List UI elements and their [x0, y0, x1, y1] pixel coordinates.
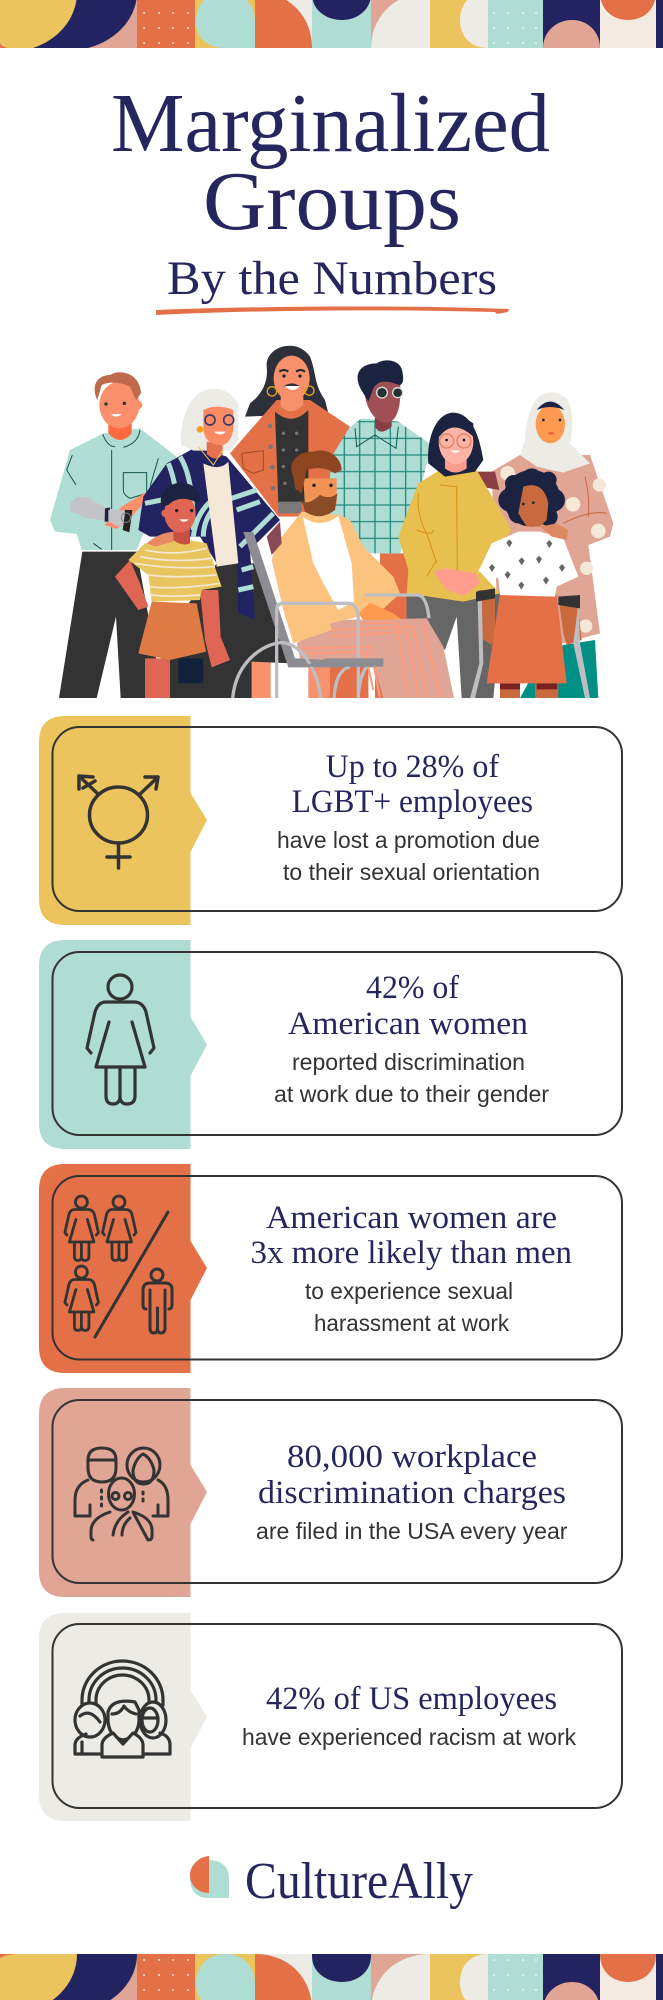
icon: three people under rainbow — [75, 1661, 170, 1757]
title — [111, 77, 550, 248]
title: Groups — [203, 155, 461, 248]
card 1: LGBT+ promotion — [39, 716, 622, 925]
card 1 colour tab — [39, 716, 207, 925]
top geometric banner — [0, 0, 663, 48]
card 3 outline — [52, 1176, 622, 1360]
orange underline stroke — [156, 306, 509, 315]
icon: woman — [87, 975, 154, 1104]
card 3 colour tab — [39, 1164, 207, 1373]
icon: three women to one man — [65, 1196, 172, 1337]
card 4 heading — [258, 1439, 566, 1511]
card 5 heading: 42% of US employees — [266, 1681, 557, 1717]
card 4 body: are filed in the USA every year — [256, 1518, 568, 1544]
card 1 heading — [292, 749, 533, 820]
card 2: American women discrimination — [39, 940, 622, 1149]
card 2 body — [274, 1049, 549, 1107]
icon: transgender symbol — [79, 776, 158, 868]
card 2 body: at work due to their gender — [274, 1081, 549, 1107]
card 4 colour tab — [39, 1388, 207, 1597]
card 5: racism at work — [39, 1613, 622, 1821]
card 5 outline — [52, 1624, 622, 1808]
person: man in wheelchair — [233, 450, 454, 698]
card 4 outline — [52, 1400, 622, 1583]
card 3 heading: 3x more likely than men — [250, 1235, 572, 1271]
person: man with prosthetic arm in mint shirt — [50, 372, 177, 698]
person: boy in yellow striped shirt — [115, 483, 230, 698]
card 4 heading: 80,000 workplace — [287, 1439, 537, 1475]
card 2 colour tab — [39, 940, 207, 1149]
logo wordmark: CultureAlly — [245, 1853, 473, 1910]
card 4 heading: discrimination charges — [258, 1475, 566, 1511]
bottom geometric banner — [0, 1954, 663, 2000]
card 2 heading: 42% of — [366, 970, 459, 1006]
icon: three people — [75, 1448, 168, 1540]
person: woman in hijab — [492, 392, 613, 698]
card 2 heading — [288, 970, 528, 1042]
card 5 colour tab — [39, 1613, 207, 1821]
card 2 outline — [52, 952, 622, 1135]
person: man with dark glasses in plaid shirt — [320, 360, 432, 620]
card 2 heading: American women — [288, 1006, 528, 1042]
card 3 heading — [250, 1200, 572, 1271]
subtitle: By the Numbers — [167, 252, 497, 305]
person: girl with crutches — [470, 468, 590, 698]
card 3 body: harassment at work — [314, 1310, 509, 1336]
card 1 heading: Up to 28% of — [326, 749, 499, 785]
card 1 body — [277, 827, 540, 885]
logo mark — [190, 1856, 229, 1898]
card 1 body: to their sexual orientation — [283, 859, 540, 885]
title: Marginalized — [111, 77, 550, 170]
card 3 body — [305, 1278, 513, 1336]
person: woman in yellow shirt — [398, 413, 512, 698]
card 4: discrimination charges — [39, 1388, 622, 1597]
illustration: group of diverse people — [50, 346, 613, 698]
CultureAlly logo — [190, 1853, 473, 1910]
person: woman with moustache in orange jacket — [230, 346, 350, 517]
card 5 body: have experienced racism at work — [242, 1724, 576, 1750]
person: older woman in striped cardigan — [138, 389, 293, 698]
card 1 heading: LGBT+ employees — [292, 784, 533, 820]
card 3: sexual harassment — [39, 1164, 622, 1373]
card 3 heading: American women are — [266, 1200, 557, 1236]
card 3 body: to experience sexual — [305, 1278, 513, 1304]
card 2 body: reported discrimination — [292, 1049, 525, 1075]
card 1 outline — [52, 727, 622, 911]
card 1 body: have lost a promotion due — [277, 827, 540, 853]
